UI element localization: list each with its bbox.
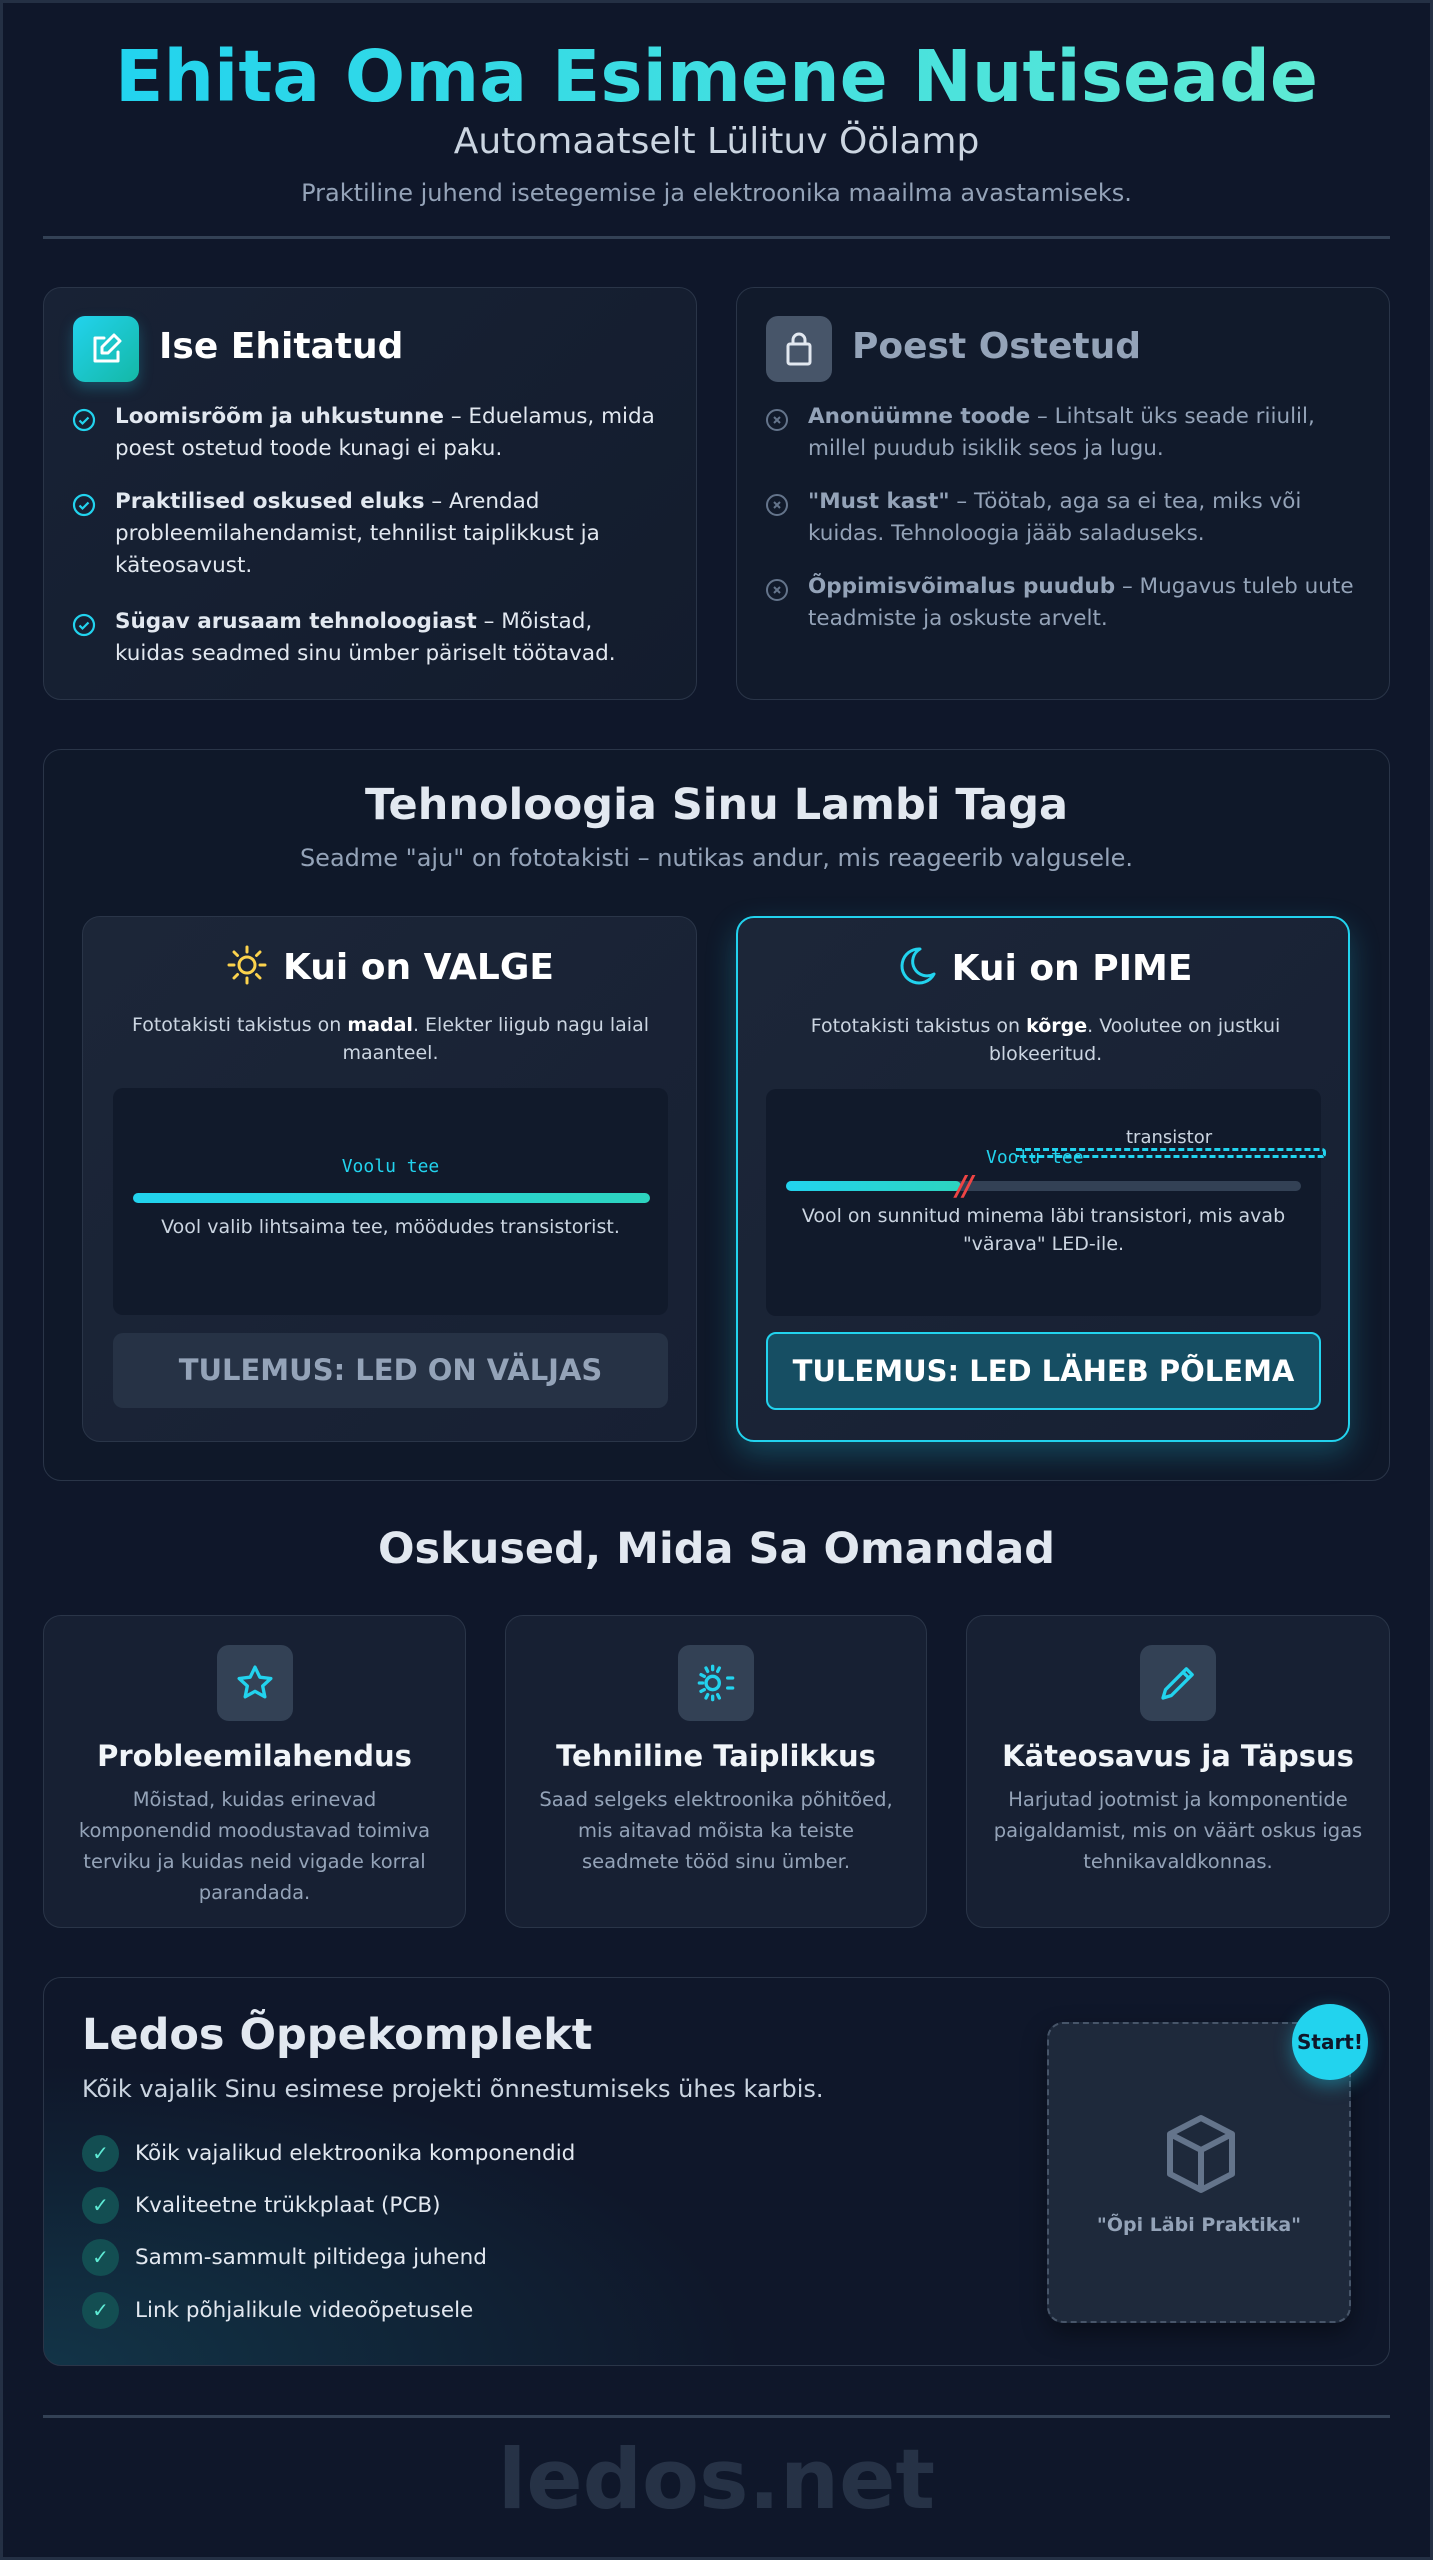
checklist bbox=[82, 2135, 575, 2329]
result bbox=[113, 1333, 668, 1408]
footer brand: ledos.net bbox=[498, 2431, 935, 2528]
heading: skills: Oskused, Mida Sa Omandad bbox=[378, 1524, 1055, 1574]
panel: Poest Ostetud: "Must kast" – Töötab, aga sa ei tea, miks või kuidas. Tehnoloogia jääb saladuseks. bbox=[808, 489, 1301, 546]
description: Fototakisti takistus on kõrge. Voolutee on justkui blokeeritud. bbox=[811, 1015, 1280, 1065]
description: Fototakisti takistus on madal. Elekter liigub nagu laial maanteel. bbox=[132, 1014, 649, 1064]
heading: Ise Ehitatud bbox=[159, 326, 403, 367]
checklist: Kvaliteetne trükkplaat (PCB) bbox=[135, 2193, 440, 2218]
checklist: ✓ bbox=[92, 2141, 109, 2165]
skill: Tehniline Taiplikkus: Saad selgeks elektroonika põhitõed, mis aitavad mõista ka teiste seadmete tööd sinu ümber. bbox=[539, 1788, 893, 1873]
card: dark bbox=[736, 916, 1350, 1442]
skill: Probleemilahendus: Probleemilahendus bbox=[97, 1739, 412, 1773]
icon: bag bbox=[766, 316, 832, 382]
heading: Poest Ostetud bbox=[852, 326, 1141, 367]
diagram: Vool valib lihtsaima tee, möödudes transistorist. bbox=[161, 1216, 620, 1238]
panel: technology bbox=[43, 749, 1390, 1481]
checklist: ✓ bbox=[92, 2245, 109, 2269]
skill: Probleemilahendus: Mõistad, kuidas erinevad komponendid moodustavad toimiva terviku ja kuidas neid vigade korral parandada. bbox=[79, 1788, 430, 1904]
card: light bbox=[82, 916, 697, 1442]
card title with sun icon: Kui on VALGE bbox=[283, 947, 554, 988]
panel: Ise Ehitatud: Praktilised oskused eluks – Arendad probleemilahendamist, tehnilist taiplikkust ja käteosavust. bbox=[115, 489, 600, 578]
card title with moon icon: Kui on PIME bbox=[952, 948, 1192, 989]
diagram bbox=[113, 1088, 668, 1315]
icon: pencil bbox=[73, 316, 139, 382]
checklist: ✓ bbox=[92, 2193, 109, 2217]
panel: kit bbox=[43, 1977, 1390, 2366]
skill: Tehniline Taiplikkus: Tehniline Taiplikkus bbox=[556, 1739, 876, 1773]
result: TULEMUS: LED ON VÄLJAS bbox=[179, 1353, 602, 1387]
badge: Start bbox=[1292, 2004, 1368, 2080]
subheading: Seadme "aju" on fototakisti – nutikas andur, mis reageerib valgusele. bbox=[300, 844, 1133, 872]
icon: star bbox=[216, 1645, 292, 1721]
checklist: ✓ bbox=[92, 2298, 109, 2322]
subtitle: Automaatselt Lülituv Öölamp bbox=[454, 121, 979, 162]
checklist: Kõik vajalikud elektroonika komponendid bbox=[135, 2141, 575, 2166]
box: Õpi Läbi Praktika: "Õpi Läbi Praktika" bbox=[1097, 2214, 1301, 2236]
diagram bbox=[766, 1089, 1321, 1316]
result bbox=[766, 1332, 1321, 1410]
list: Loomisrõõm ja uhkustunne – Eduelamus, mida poest ostetud toode kunagi ei paku. bbox=[115, 404, 655, 461]
skill: Käteosavus: Harjutad jootmist ja komponentide paigaldamist, mis on väärt oskus igas tehnikavaldkonnas. bbox=[994, 1788, 1362, 1873]
icon: cube bbox=[1167, 2115, 1235, 2193]
heading: Tehnoloogia Sinu Lambi Taga bbox=[365, 780, 1068, 830]
panel: Poest Ostetud bbox=[736, 287, 1390, 700]
checklist: Samm-sammult piltidega juhend bbox=[135, 2245, 487, 2270]
diagram: transistor bbox=[1126, 1127, 1212, 1148]
skill: Tehniline Taiplikkus bbox=[505, 1615, 927, 1928]
tagline: Praktiline juhend isetegemise ja elektroonika maailma avastamiseks. bbox=[301, 179, 1132, 207]
diagram: Vool on sunnitud minema läbi transistori, mis avab "värava" LED-ile. bbox=[802, 1205, 1285, 1255]
icon: pencil bbox=[1140, 1645, 1216, 1721]
panel: Ise Ehitatud bbox=[43, 287, 697, 700]
icon: chip bbox=[678, 1645, 754, 1721]
skill: Käteosavus: Käteosavus ja Täpsus bbox=[1002, 1739, 1354, 1773]
kit title: Ledos Õppekomplekt bbox=[82, 2010, 592, 2060]
diagram: Voolu tee bbox=[342, 1156, 439, 1177]
panel: Poest Ostetud: Õppimisvõimalus puudub – Mugavus tuleb uute teadmiste ja oskuste arvelt. bbox=[808, 574, 1354, 631]
skill: Probleemilahendus bbox=[43, 1615, 466, 1928]
badge: Start: Start! bbox=[1297, 2030, 1363, 2054]
skill: Käteosavus bbox=[966, 1615, 1390, 1928]
kit subtitle: Kõik vajalik Sinu esimese projekti õnnestumiseks ühes karbis. bbox=[82, 2075, 824, 2103]
box: Õpi Läbi Praktika bbox=[1047, 2022, 1351, 2323]
checklist: Link põhjalikule videoõpetusele bbox=[135, 2298, 473, 2323]
panel: Ise Ehitatud: Sügav arusaam tehnoloogiast – Mõistad, kuidas seadmed sinu ümber päriselt töötavad. bbox=[115, 609, 616, 666]
result: TULEMUS: LED LÄHEB PÕLEMA bbox=[793, 1354, 1294, 1388]
title: Ehita Oma Esimene Nutiseade bbox=[115, 35, 1318, 118]
diagram: Voolu tee bbox=[986, 1147, 1084, 1168]
icon: break: // bbox=[956, 1169, 970, 1202]
list: Anonüümne toode – Lihtsalt üks seade riiulil, millel puudub isiklik seos ja lugu. bbox=[808, 404, 1315, 461]
